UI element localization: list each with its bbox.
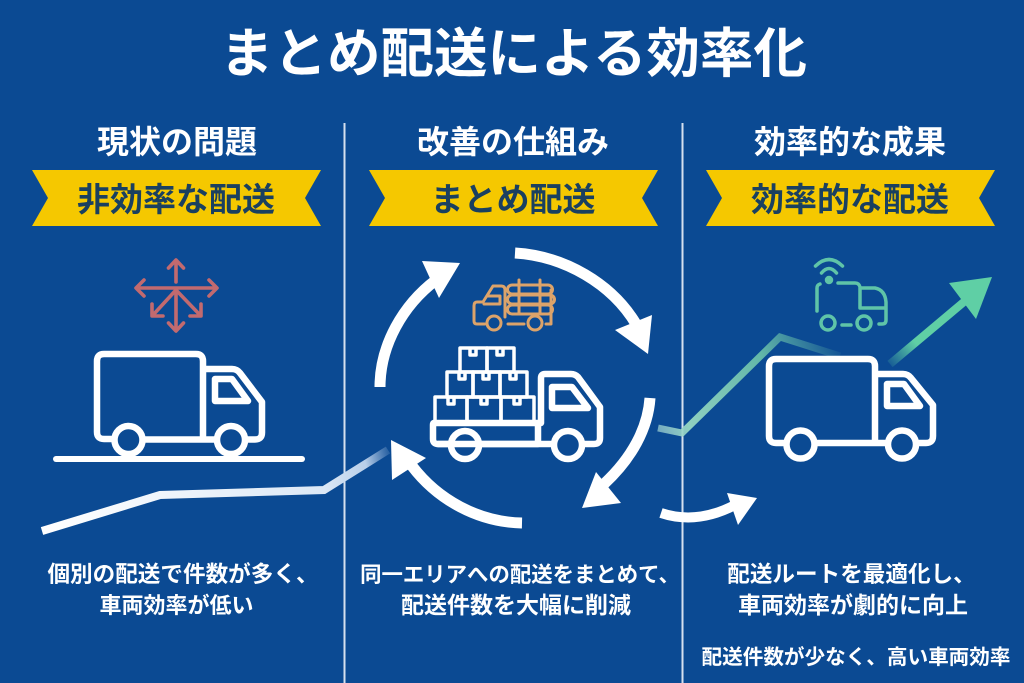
heading: current problem: 現状の問題 [97, 124, 257, 160]
text: problem description: 個別の配送で件数が多く、 [47, 561, 319, 587]
icon: efficient truck [769, 359, 933, 458]
icon: scattered arrows [136, 260, 217, 331]
panel: current problem [32, 124, 388, 618]
text: result description: 車両効率が劇的に向上 [738, 592, 968, 618]
icon: connected truck [816, 260, 886, 330]
text: mechanism description [360, 563, 680, 618]
heading: result: 効率的な成果 [754, 124, 946, 160]
icon: truck loaded with boxes [433, 348, 600, 459]
arrow: rising green [890, 277, 992, 364]
heading: mechanism: 改善の仕組み [417, 124, 609, 160]
text: mechanism description: 同一エリアへの配送をまとめて、 [360, 563, 680, 587]
ribbon: inefficient delivery: 非効率な配送 [77, 181, 275, 218]
arrow: curved white [661, 493, 757, 525]
ribbon: consolidated delivery: まとめ配送 [430, 181, 596, 218]
trend line: low [42, 450, 388, 531]
icon: orange truck with load [474, 280, 554, 330]
ribbon: inefficient delivery [32, 170, 321, 226]
text: result summary: 配送件数が少なく、高い車両効率 [702, 645, 1010, 669]
ribbon: consolidated delivery [369, 170, 658, 226]
text: result description [727, 562, 976, 618]
title: まとめ配送による効率化 [220, 25, 807, 84]
text: mechanism description: 配送件数を大幅に削減 [401, 592, 631, 618]
icon: delivery truck [97, 354, 262, 454]
trend line: rising [658, 337, 840, 433]
text: result description: 配送ルートを最適化し、 [727, 562, 976, 587]
text: problem description [47, 561, 319, 618]
panel: efficient result [658, 124, 1010, 669]
text: problem description: 車両効率が低い [99, 593, 254, 618]
road line [56, 456, 302, 462]
icon: cycle arrows [380, 253, 652, 523]
ribbon: efficient delivery: 効率的な配送 [751, 181, 949, 218]
ribbon: efficient delivery [706, 170, 995, 226]
panel: improvement mechanism [360, 124, 680, 618]
